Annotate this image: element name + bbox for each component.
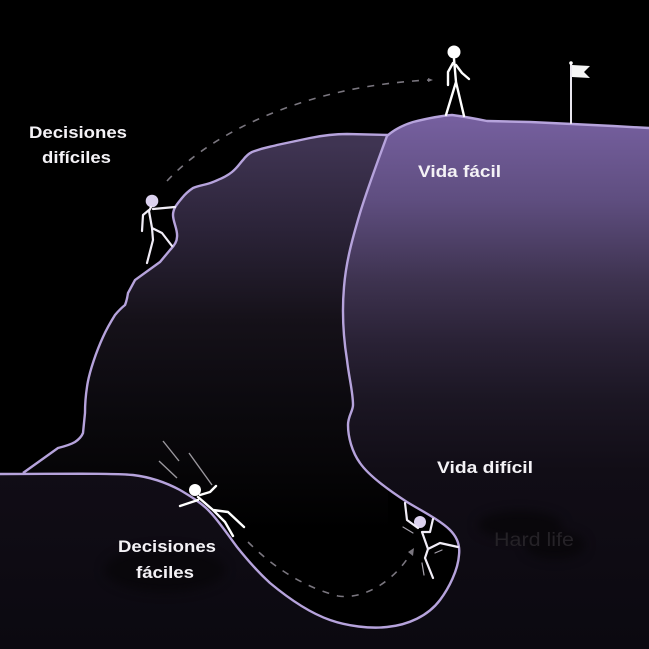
icon: flag [569,61,590,124]
label: decisiones difíciles [29,123,127,167]
icon: walking stick figure [446,46,469,116]
left hill fill: difficult climb [23,134,388,530]
smudge behind easy decisions [105,548,225,592]
left hill outline [23,134,388,473]
motion lines above falling figure [159,441,212,485]
arrowhead: slide arc [408,548,414,556]
icon: falling stick figure [180,484,244,536]
icon: climbing stick figure [142,195,175,263]
smudge behind hard life [478,511,585,559]
arrowhead: climb arc [428,78,433,82]
icon: hanging stick figure in the pit [403,503,458,578]
label: decisiones fáciles: Decisiones [118,537,216,556]
faint hard life text: Hard life [494,530,574,551]
label: decisiones fáciles [118,537,216,582]
label: decisiones fáciles: fáciles [136,563,194,582]
terrain outline [0,115,649,628]
dashed arc: climb to the top [167,80,430,181]
label: decisiones difíciles: difíciles [42,148,111,167]
dashed arc: slide to the pit [248,542,411,597]
label: vida fácil: Vida fácil [418,162,501,181]
label: decisiones difíciles: Decisiones [29,123,127,142]
label: vida difícil: Vida difícil [437,458,533,477]
